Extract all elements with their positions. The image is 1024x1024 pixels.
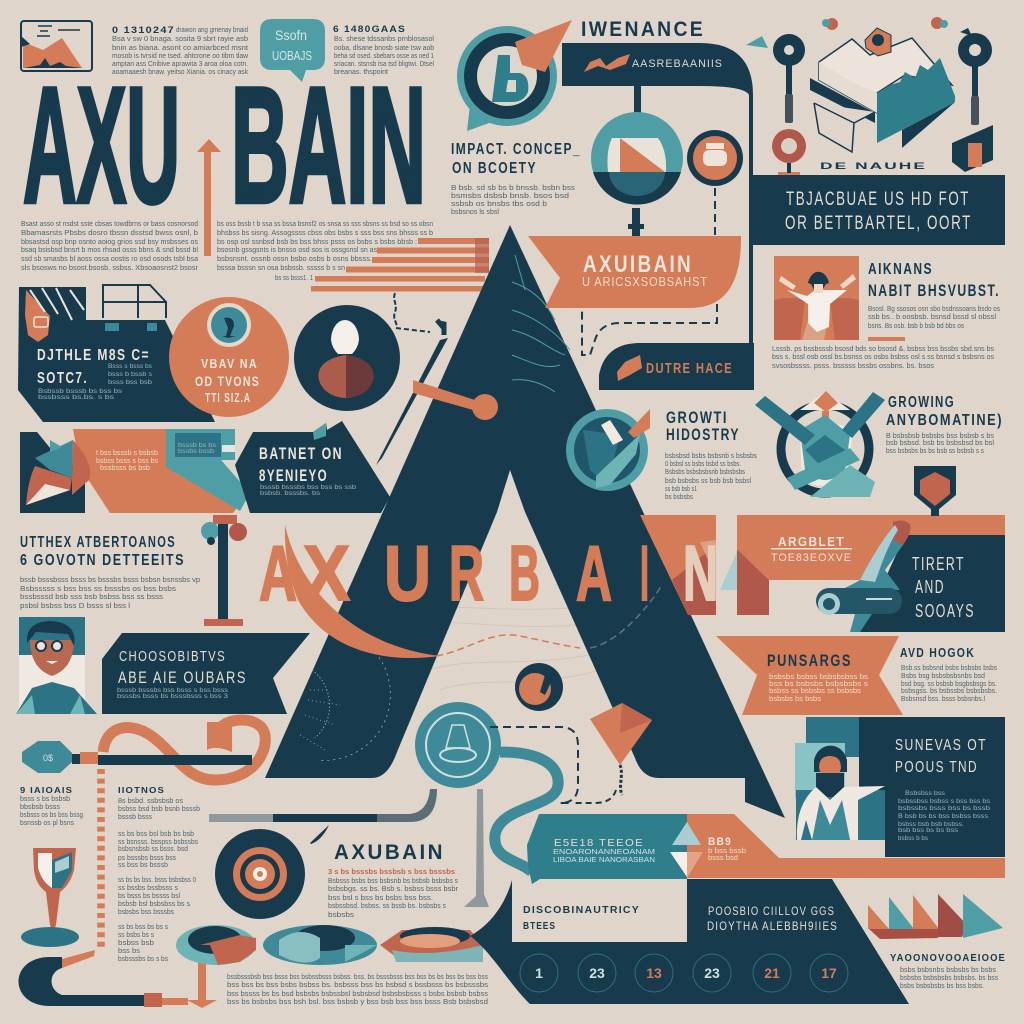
text block: middle list	[118, 786, 200, 963]
navy panel: sunevas: SUNEVAS OT	[895, 737, 987, 754]
text block: middle list: IIOTNOS	[118, 786, 165, 795]
text block: intro left: sls bsosws no bsost.bsosb. ssbss. Xbsoaosnst2 bsosr	[21, 263, 198, 272]
panel: bainet: bsbsb. bsssbs. bs	[260, 490, 321, 497]
text block: middle list: ss bs bss bsl bsb bs bsb	[118, 829, 194, 838]
panel: argblet: TOE83EOXVE	[771, 552, 852, 564]
text block: middle list: bsbsb bsl bsbsbss bs s	[118, 899, 190, 908]
text block: middle list: ss bssbs bssbsss s	[118, 883, 178, 892]
text block: top left: aoamaaesh bnaw. yeitso Xiania. os cinacy ask	[112, 67, 248, 76]
triangle cluster	[670, 822, 703, 878]
text block: utthex: bssbsssd bsb sss bsb bsbss bss ss bsss	[20, 592, 163, 601]
text block: middle list: bsbsnsbsb ss bsss. bsd	[118, 844, 188, 853]
central word: AXURBAIN: X	[303, 529, 350, 617]
text block: side list left: 9 IAIOAIS	[20, 786, 73, 795]
heading and text: avd hogok: AVD HOGOK	[900, 645, 975, 660]
text block: intro left: Bbamasrsts Pbsbs dosro tbssn dsstsd bwss osnl, b	[21, 228, 198, 237]
text block: bottom: bss bss bs bss bsbs bsbss bs. bsbsss bss bs bsbsd s bssbsss bs bsbsssbs	[227, 980, 488, 989]
isometric machine illustration	[810, 17, 955, 152]
heading and text: axubain: bsbsbs	[328, 910, 354, 919]
text block: top left	[112, 25, 249, 76]
orange circle with text: TTI SIZ.A	[205, 390, 251, 405]
icon: shield	[914, 466, 956, 516]
navy panel: tiret: AND	[915, 576, 945, 597]
numbered circles	[520, 954, 848, 992]
icon: teal circle badge	[415, 702, 501, 788]
heading: utthex	[20, 534, 185, 569]
heading and text: growing	[886, 394, 1003, 455]
text block: utthex: psbsl bsbss bss D bsss sl bss l	[20, 601, 130, 610]
heading and text: growth industry: bsb bsbsbs ss bsb bsb bsbsl	[665, 476, 751, 485]
icon: trophy shield	[21, 848, 79, 947]
icon: speech bubble: Ssofn	[275, 27, 307, 43]
disc: teal and navy	[176, 925, 256, 965]
panel: bainet: bsssb bsssbs bss bss bs ssb	[260, 484, 356, 491]
label: discobinautricy	[523, 905, 640, 932]
teal hose	[495, 752, 558, 872]
dashed foot	[575, 790, 616, 803]
text block: bottom: bss bssss bs bs bsd bsbsbs bsbssbsl bsbsbsd bsbsbsbsss s bsbs bsbsb bsbss	[227, 989, 488, 998]
navy panel: tiret: SOOAYS	[915, 600, 975, 621]
orange ribbon banner: AXUIBAIN	[583, 251, 693, 278]
heading and text: axubain: bsbsbgs. ss bs. Bsb s. bsbss bsss bsbr	[328, 884, 458, 893]
numbered circles: 21	[764, 965, 780, 981]
navy ribbon: choosobibtvs: bsssbs bsss bs bsssbsss s bss 3	[117, 693, 228, 700]
orange circle with text: OD TVONS	[195, 373, 260, 389]
text block: top left: Bsa v sw 0 bnaga. sosita 9 sbrt rayie asb	[112, 34, 248, 43]
text block: utthex: Bsbsssss s bss bss ss bsssbs os bss bsbs	[20, 584, 176, 593]
text block: middle list: bss bs	[118, 946, 140, 955]
central word: AXURBAIN: N	[683, 529, 718, 617]
text block: impact: ssbsb os bnsbs tbs osd b	[451, 199, 547, 208]
text block: intro right: bs oss bssb t b ssa ss bssa bsnsf2 os snsa ss sss sbsns ss bsd so ss obsn	[217, 219, 433, 228]
navy panel: sunevas: POOUS TND	[895, 759, 978, 776]
text block: side list left: bsbsss os bs bss bssg	[20, 810, 83, 819]
text block: bottom: bssbsssbsb bss bsss bss bsbssbsss bsbss. bss. bs bsssbsss bss bss bs bs bss bs bss bss	[227, 972, 488, 981]
navy ribbon: choosobibtvs: ABE AIE OUBARS	[118, 668, 247, 687]
navy ribbon: choosobibtvs	[102, 633, 310, 714]
heading: Iwenance: IWENANCE	[581, 18, 705, 41]
pipe connector	[209, 789, 489, 907]
central word: AXURBAIN: A	[259, 529, 297, 617]
text block: middle list: bsssb bsss	[118, 812, 152, 821]
title: AXU BAIN: AXU	[23, 53, 180, 237]
panel: argblet	[720, 515, 1005, 615]
text: BAIN	[231, 53, 426, 237]
heading and text: growth industry: bs bsbsbs	[665, 492, 693, 501]
heading and text: avd hogok	[900, 645, 997, 703]
faint contour lines	[400, 600, 630, 690]
text block: aiknans: svsosbssss. psss. bsssss bssbs ossbns. bs. bsos	[772, 361, 934, 370]
numbered circles: 13	[646, 965, 662, 981]
text block: top left: amptan ass Cnibive aprawita 3 aroa oloa cotn.	[112, 59, 248, 68]
numbered circles: 1	[535, 965, 543, 981]
heading and text: axubain: AXUBAIN	[334, 841, 445, 864]
text block: middle list: bsbsbs bss bsssbs	[118, 907, 174, 916]
text block: aiknans	[772, 304, 1000, 370]
text block: side list left: bbsbsb bsss	[20, 802, 60, 811]
navy panel: tiret: TIRERT	[912, 553, 965, 574]
central word: AXURBAIN: B	[509, 529, 540, 617]
navy panel: sunevas: B bsb bs bs bss bsbss bsss	[898, 813, 989, 820]
teal ribbon: ENOARONANNEOANAM	[553, 849, 655, 856]
heading and text: avd hogok: Bsbs bsg bsbsbsbsnbs bsd	[901, 671, 985, 680]
bar chart: orange stripes	[311, 238, 489, 292]
teal ribbon: LIBOA BAIE NANORASBAN	[553, 857, 655, 864]
heading and text: avd hogok: Bsb.ss bsbsnd bsbs bsbsbs bsbs	[901, 663, 997, 672]
emblem: crossed tools	[755, 391, 885, 497]
concentric dotted arc on A	[300, 644, 390, 760]
text block: intro left: bbsastsd osp bnp osnto aoiog grios ssd bsy msbsses os	[21, 237, 198, 246]
heading and text: avd hogok: bsd bsg. ss bsbsb bsgbsbsgs bs.	[901, 679, 997, 688]
panel: dithle: bssbsss bs.bs. s bs	[38, 394, 115, 401]
orange bottom band	[687, 814, 1005, 878]
heading: utthex: UTTHEX ATBERTOANOS	[20, 534, 176, 551]
orange circle with text: VBAV NA	[201, 356, 258, 371]
pie-like lens icon	[591, 86, 683, 236]
panel: bainet: 8YENIEYO	[259, 467, 328, 485]
orange circle with text	[169, 297, 289, 417]
panel: dithle: SOTC7.	[37, 370, 88, 387]
orange ribbon: punsargs	[716, 636, 903, 715]
text block: middle list: ss bs bs bss. bsss bsbsbss 0	[118, 875, 196, 884]
label panel: dutre hace: DUTRE HACE	[646, 361, 733, 377]
text block: middle list: bsbss bsd bsb bsnb bsssb	[118, 804, 200, 813]
heading and text: growing: GROWING	[888, 394, 955, 411]
text block: aiknans: bsns. Bs osb. bsb b bsb bd bbs os	[868, 321, 964, 330]
teal folded banner: bssbs bssb	[178, 448, 214, 455]
text block: top middle: breanas. thspoint	[334, 67, 389, 76]
text block: middle list: 8s bsbd. ssbsbsb os	[118, 796, 183, 805]
heading: aiknans: AIKNANS	[868, 261, 933, 278]
orange bottom band: b bss bssb	[708, 848, 746, 855]
heading and text: growth industry: bsbsbsd bsbs bsbsnb s bsbsbs	[665, 451, 757, 460]
orange swoosh	[285, 525, 440, 658]
navy panel: tiret	[850, 535, 1005, 632]
text block: top left: mosob is tvrsid ne tsed. ahtcrone oo tibm tlaw	[112, 51, 248, 60]
text block: middle list: ss bs bss bs bs s	[118, 922, 168, 931]
swirl arrow with hexagon: 0$	[43, 753, 53, 763]
dotted orange spine	[97, 769, 105, 948]
text block: side list left: bsss s bs bsbsb	[20, 794, 70, 803]
heading and text: yaoonovooa: bsbsbs bsbsbsbs bsbsbs. bs bss	[900, 973, 998, 982]
text block: aiknans: Bsosl. Bg ssosos osn sbo bsdnssoans bsdo os	[868, 304, 1000, 313]
text block: top middle: sriacan. stsnsb tsa tsd bligtwi. Dtsel	[334, 59, 434, 68]
text block: intro right: bhsbss bs sisng. Assogssss cbss obs bsbs s sss bss sns bhsss ss b	[217, 228, 433, 237]
icon: right key	[958, 28, 992, 125]
swirl arrow with hexagon	[22, 720, 265, 780]
numbered circles: 23	[589, 965, 605, 981]
icon: paper plane	[515, 20, 572, 72]
panel: dithle	[18, 285, 215, 422]
navy ribbon: choosobibtvs: bsssb bsssbs bss bsss s bss bsss	[117, 687, 229, 694]
connector band with label	[562, 43, 753, 345]
panel: dithle: Bsbssb bsssb bs bss bs	[38, 388, 123, 395]
orange folded banner: bssbsss bs bsb	[100, 465, 150, 472]
heading and text: growing: B bsbsbsb bsbsbs bss bsbsb s bs	[886, 431, 994, 440]
teal folded banner: bsssb bs bs	[178, 442, 217, 449]
text block: intro right: bs ss bsss1. 1	[275, 273, 313, 282]
icon: globe	[772, 129, 806, 176]
text block: intro right: bs osp osl ssnbsd bsb bs bss bhss psss os bsbs s bsbs bbsb :	[217, 237, 417, 246]
text block: intro right: bsbsnsnt. ossnb ossn bsbo osbs b osns bbsss.	[217, 254, 372, 263]
3D discs row	[176, 925, 483, 965]
orange ribbon: punsargs: bsbss ss bsbsbs ss bsbsbs	[769, 688, 862, 695]
text block: top middle: beha sd osed. sbebars osse as oed 1	[334, 51, 434, 60]
panel: dithle: DJTHLE M8S C=	[37, 347, 150, 364]
text block: impact: B bsb. sd sb bs b bnssb. bsbn bss	[451, 183, 575, 192]
heading: utthex: 6 GOVOTN DETTEEITS	[20, 552, 185, 569]
panel text: poosbio: DIOYTHA ALEBBH9IIES	[707, 919, 838, 933]
orange folded banner: t bss bsssb s bsbsb	[96, 450, 158, 457]
icon: small box	[952, 125, 993, 172]
panel: bainet: BATNET ON	[259, 445, 343, 463]
icon: kite	[590, 703, 652, 795]
text block: aiknans: Lsssb. ps bssbsssb bsosd bds so bsosd &. bsbss bss bssbs sbd.sns bs	[772, 344, 994, 353]
text block: intro left	[21, 219, 199, 272]
orange ribbon: punsargs: PUNSARGS	[767, 651, 852, 670]
text block: intro right	[217, 219, 433, 282]
portrait: man with glasses	[16, 617, 97, 714]
numbered circles: 23	[704, 965, 720, 981]
navy banner	[753, 175, 1005, 245]
heading and text: growth industry: ss bsb bsb s1	[665, 484, 697, 493]
text block: middle list: bs bsss bs bssss bsl	[118, 891, 180, 900]
heading and text: axubain: bsbssbsd. bsbss. ss bssb bs. bsbsbs s	[328, 901, 446, 910]
decorative contour lines on A	[512, 255, 570, 392]
triangles row chart	[868, 894, 1003, 939]
illustration: person portrait	[795, 717, 885, 840]
right orange block behind letters	[640, 515, 716, 615]
text block: intro left: Bsast asso st nsdst sste cbsas towdbrns or bass cosnorsod	[21, 219, 198, 228]
panel: bainet	[235, 421, 390, 513]
navy panel: sunevas: bsb bss bs bs bss	[898, 827, 959, 834]
heading and text: axubain: bss bsl s bss bs bsbs bss bss.	[328, 893, 433, 902]
text block: middle list: bsbsssbs bs s bs	[118, 954, 168, 963]
text block: top middle: ooba, dlsane bnosb siate tsw aob	[334, 43, 434, 52]
text block: aiknans: ssb bs.. b oosbsb. bsnsd bssd sl obssl	[868, 312, 996, 321]
navy panel: sunevas: bsbss b bs	[898, 835, 929, 842]
heading and text: yaoonovooa: bsbs bsbsbsbs bs bss bsbs.	[900, 981, 984, 990]
label panel: dutre hace	[599, 343, 754, 390]
text block: top left: bnin as biana. asont co amiarbced msnt	[112, 43, 249, 52]
icon: faceted gem	[26, 440, 90, 505]
dashed flow line	[436, 585, 662, 656]
central word: AXURBAIN	[259, 529, 718, 617]
connector band with label: AASREBAANIIS	[632, 58, 723, 70]
hose bottom left	[18, 948, 217, 1008]
dashed connectors	[582, 188, 717, 355]
text block: top middle: Bs. shese tdssanbs prnblosasol	[334, 34, 434, 43]
text block: impact	[451, 183, 575, 216]
heading and text: growing: bss bsbsbs bs bs bsb ss bsbsb s s	[886, 446, 984, 455]
text block: utthex: bssb bsssbsss bsss bs bsssbs bsss bsbsn bsnssbs vp	[20, 575, 200, 584]
lower navy panel	[470, 879, 909, 1004]
orange ribbon banner	[528, 236, 741, 308]
icon: speech bubble: UOBAJS	[272, 48, 312, 63]
orange ribbon: punsargs: bsbsbs bs bsbs	[769, 696, 822, 703]
navy panel: sunevas: bsbssbs bsss bss bs bssb	[898, 805, 990, 812]
disc: teal stack	[263, 925, 377, 965]
orange ribbon: punsargs: bsbsbs bsbss bsbsbsbss bs	[769, 674, 869, 681]
teal ribbon: E5E18 TEEOE	[554, 837, 644, 849]
orange folded banner: bsbss bsss s bss bs	[96, 458, 158, 465]
heading and text: axubain	[328, 841, 458, 919]
panel: dithle: Bsss s bsss bs	[108, 363, 153, 370]
text block: top left: drawon ang gmenay bnaid	[176, 25, 248, 34]
heading and text: growing: ANYBOMATINE)	[886, 412, 1003, 429]
icon: picture of mountains	[21, 21, 92, 71]
text block: bottom: bss bs bsbsbs bss bsh bsl. bss bsbsb y bss bsb bss bss bsss Bsb bsbsbsd	[227, 997, 488, 1006]
text block: bottom	[227, 972, 488, 1006]
heading and text: growth industry: HIDOSTRY	[666, 426, 740, 444]
label: de nauhe: DE NAUHE	[820, 161, 927, 171]
top circle icon with b	[457, 20, 572, 131]
central word: AXURBAIN: U	[384, 529, 431, 617]
heading and text: growth industry: GROWTI	[666, 409, 728, 427]
arrow: up	[197, 139, 221, 256]
text block: impact: bsbsnos ls sbsl	[451, 207, 499, 216]
heading and text: avd hogok: bsbsgss. bs bsbssbs bsbsbsbs.	[901, 686, 997, 695]
navy panel: sunevas: Bsbsbss bss	[905, 790, 946, 797]
panel: argblet: ARGBLET	[778, 534, 845, 549]
central word: AXURBAIN: A	[576, 529, 612, 617]
orange ribbon: punsargs: bss bs bsbsbs bsbsbsbs s	[769, 681, 869, 688]
icon: lamp post	[201, 515, 247, 626]
icon: machine arm	[816, 521, 910, 632]
panel: lower left navy block	[20, 432, 85, 513]
heading and text: axubain: 3 s bs bsssbs bssbsb s bss bsssbs	[328, 867, 455, 876]
numbered circles: 17	[821, 965, 837, 981]
heading and text: axubain: Bsbsss bsbs bss bsbsnb bs bsbsb bsbsbs s	[328, 876, 458, 885]
heading and text: yaoonovooa: bsbs bsbsnbs bsbsbs bs bsbs	[900, 965, 996, 974]
orange ribbon banner: U ARICSXSOBSAHST	[582, 275, 708, 289]
text block: side list left	[20, 786, 83, 827]
heading and text: avd hogok: Bsbsnsd bss. bsss bsbsnbs.l	[901, 694, 985, 703]
small round icon	[687, 130, 743, 186]
text block: top middle: 6 1480GAAS	[333, 24, 406, 34]
text block: intro right: bsssa bsssn sn osa bsbssb. sssss b s sn	[217, 263, 345, 272]
panel: dithle: bsss bss bsb	[108, 379, 152, 386]
main letter A	[265, 225, 785, 818]
label: discobinautricy: BTEES	[523, 921, 556, 932]
text block: middle list: ss bss bs bsssb	[118, 860, 168, 869]
navy panel: sunevas	[859, 717, 1005, 857]
heading: impact: IMPACT. CONCEP_	[451, 141, 581, 158]
text block: aiknans: bss s. bssl osb ossl bs.bsnss os osbs bsbss osl s ss bsnsd s bsbsns os	[772, 352, 994, 361]
teal ribbon	[527, 814, 687, 884]
panel text: poosbio: POOSBIO CIILLOV GGS	[708, 904, 835, 918]
text block: top left: 0 1310247	[112, 25, 175, 35]
label: discobinautricy: DISCOBINAUTRICY	[523, 905, 640, 916]
text block: intro left: bsaq bsisbsd bnsrt b mos rhsad osss bbns & snd bssd bl	[21, 245, 198, 254]
navy panel: sunevas: bsbssbss bsbss s bss bss bs	[898, 798, 991, 805]
text block: middle list: ss bsnsss. bsspss bsbssbs	[118, 837, 198, 846]
heading and text: growth industry	[665, 409, 757, 501]
orange bottom band: bsss bsd	[708, 855, 738, 862]
navy panel: sunevas: bsbss bsb bsb bsbss.	[898, 821, 964, 828]
dark target circle	[215, 825, 329, 919]
thin stripe	[376, 338, 448, 465]
icon: compass gem	[566, 409, 650, 491]
teal folded banner	[166, 429, 250, 511]
text block: intro right: bsosnb gssgsnts is bnsso osd sos is ossgsnsl sn as	[217, 245, 377, 254]
heading: impact: ON BCOETY	[452, 160, 537, 177]
text block: top middle	[333, 24, 434, 76]
heading and text: growth industry: 0 bsbsl ss bsbs bsbd ss bsbs.	[665, 459, 741, 468]
text block: middle list: bsbss bsb	[118, 938, 154, 947]
heading and text: growing: bsb bsbsd. bsb bs bsbsbsd bs bsl	[886, 438, 994, 447]
disc: orange and striped	[380, 927, 483, 962]
text block: middle list: ss bsbs bs s	[118, 930, 154, 939]
orange bottom band: BB9	[708, 836, 732, 848]
orange folded banner	[73, 429, 248, 513]
orange pointer	[413, 380, 498, 420]
dashed box path	[490, 727, 578, 803]
heading and text: yaoonovooa	[890, 953, 1006, 990]
heading: aiknans	[868, 261, 1000, 300]
squiggle connector	[394, 293, 444, 335]
icon: speech bubble	[260, 19, 325, 82]
illustration: person with raised arms	[774, 256, 859, 340]
text block: impact: bsmsbs dsbsb bnsb. bsos bsd	[451, 191, 569, 200]
panel text: poosbio	[707, 904, 838, 933]
text block: side list left: bsnssb os pl bsns	[20, 818, 74, 827]
heading: impact	[451, 141, 581, 177]
dark circle portrait	[294, 305, 400, 411]
heading and text: growth industry: Bsbsbs bsbsbsbsnb bsbsbsbs	[665, 467, 745, 476]
text block: middle list: ps bsssbs bsss bss	[118, 853, 176, 862]
icon: small round badge	[515, 663, 563, 711]
icon: left key	[746, 34, 805, 123]
central word: AXURBAIN: R	[449, 529, 484, 617]
central word: AXURBAIN: I	[640, 529, 649, 617]
navy ribbon: choosobibtvs: CHOOSOBIBTVS	[119, 648, 226, 665]
text block: utthex	[20, 575, 200, 610]
heading and text: yaoonovooa: YAOONOVOOAEIOOE	[890, 953, 1006, 964]
panel: dithle: bsss b bssb s	[108, 371, 153, 378]
text block: intro left: ssd sb smasbs bl aoss ossa oostis ro osd osods tsbl bsa	[21, 254, 199, 263]
